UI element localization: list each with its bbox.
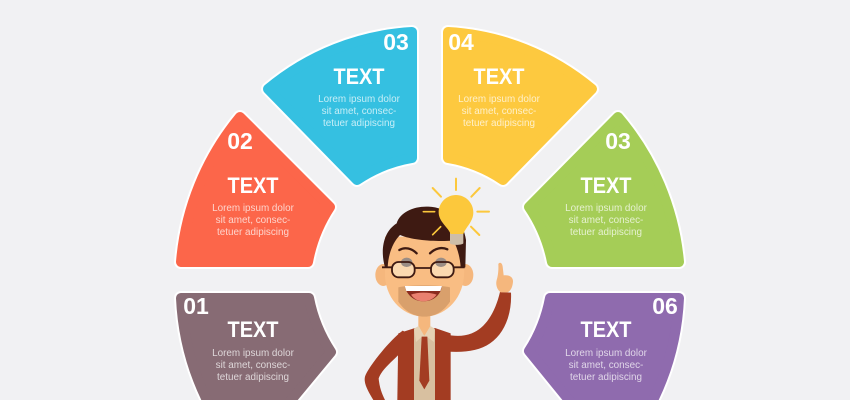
panel: 03 blue: Lorem ipsum dolor — [318, 94, 401, 105]
panel: 03 green: TEXT — [580, 173, 632, 198]
panel: 03 green: tetuer adipiscing — [570, 227, 642, 238]
panel: 04 yellow: 04 — [448, 29, 474, 55]
panel: 03 blue: 03 — [383, 29, 409, 55]
collar — [414, 326, 435, 342]
panel: 01 brown — [181, 293, 331, 400]
panel: 03 green — [529, 117, 679, 262]
character: man with idea — [365, 179, 513, 400]
panel: 01 brown: 01 — [183, 293, 209, 319]
panel: 02 red: TEXT — [228, 173, 279, 198]
panel: 02 red: sit amet, consec- — [216, 215, 290, 226]
eyebrows — [399, 248, 447, 253]
panel: 03 blue: tetuer adipiscing — [323, 118, 395, 129]
panel: 04 yellow — [448, 29, 592, 180]
panel: 04 yellow: TEXT — [474, 64, 525, 89]
left arm — [365, 331, 414, 400]
face — [385, 237, 465, 317]
panel: 04 yellow: tetuer adipiscing — [463, 118, 535, 129]
panel: 01 brown: Lorem ipsum dolor — [212, 348, 295, 359]
light rays — [433, 179, 489, 235]
hair — [383, 207, 466, 267]
torso — [397, 328, 451, 400]
tie — [419, 337, 429, 389]
panel: 06 purple: sit amet, consec- — [569, 360, 643, 371]
panel: 04 yellow: Lorem ipsum dolor — [458, 94, 541, 105]
panel: 02 red — [181, 117, 330, 262]
glasses — [382, 262, 465, 277]
hair highlights — [423, 212, 441, 235]
panel: 02 red: tetuer adipiscing — [217, 227, 289, 238]
panel: 03 green: sit amet, consec- — [569, 215, 643, 226]
ears — [375, 264, 391, 286]
panel: 06 purple — [529, 293, 679, 400]
panel: 06 purple: 06 — [652, 293, 678, 319]
hand — [496, 263, 513, 292]
panel: 06 purple: tetuer adipiscing — [570, 372, 642, 383]
raised arm — [433, 292, 511, 352]
tongue — [411, 293, 437, 301]
panel: 03 green: Lorem ipsum dolor — [565, 203, 648, 214]
neck — [418, 313, 430, 335]
panel: 06 purple: TEXT — [580, 317, 632, 342]
panel: 03 blue — [268, 29, 412, 180]
teeth — [405, 286, 442, 291]
panel: 02 red: Lorem ipsum dolor — [212, 203, 295, 214]
mouth — [405, 286, 442, 301]
icon: light bulb — [433, 179, 489, 245]
panel: 06 purple: Lorem ipsum dolor — [565, 348, 648, 359]
panel: 02 red: 02 — [227, 128, 253, 154]
panel: 03 blue: sit amet, consec- — [322, 106, 396, 117]
shirt — [414, 329, 435, 400]
lenses — [392, 262, 454, 277]
panel: 01 brown: tetuer adipiscing — [217, 372, 289, 383]
panel: 03 blue: TEXT — [334, 64, 385, 89]
panel: 03 green: 03 — [605, 128, 631, 154]
eyes — [401, 258, 447, 267]
panel: 01 brown: TEXT — [228, 317, 279, 342]
beard — [398, 285, 450, 317]
panel: 01 brown: sit amet, consec- — [216, 360, 290, 371]
panel: 04 yellow: sit amet, consec- — [462, 106, 536, 117]
